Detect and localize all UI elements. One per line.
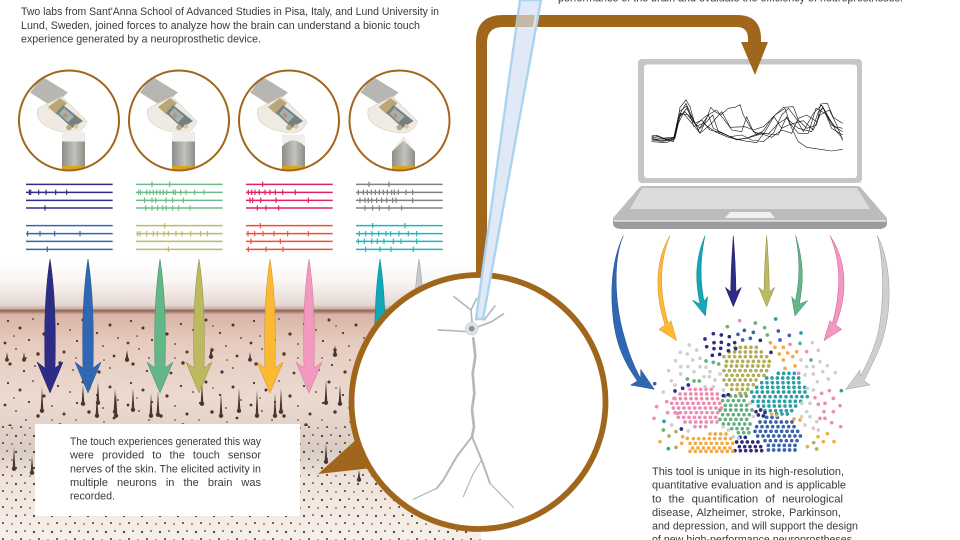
spike rasters <box>26 182 443 252</box>
raster: blue <box>26 226 113 252</box>
arrows: neuron signals into skin <box>37 259 432 393</box>
laptop base <box>613 186 887 229</box>
arrow: green <box>147 259 173 393</box>
cluster: teal <box>752 373 808 414</box>
pipette <box>476 0 541 319</box>
cluster: pink <box>672 389 722 427</box>
circle: neuron magnified <box>352 275 606 529</box>
neuron <box>413 297 513 507</box>
cluster: olive <box>724 347 773 393</box>
raster: gray <box>356 182 443 211</box>
curved arrow: teal <box>692 236 708 316</box>
intro text: Two labs from Sant'Anna School of Advanced Studies in Pisa, Italy, and Lund University in <box>21 6 439 18</box>
sparse dots: orange <box>660 343 834 447</box>
skin dense pores <box>0 424 481 540</box>
callout: touch experiences text box: were provided to the touch sensor <box>69 450 261 462</box>
sparse dots: blue <box>655 330 789 384</box>
intro text: experience generated by a neuroprosthetic device. <box>21 34 261 46</box>
callout: touch experiences text box: The touch experiences generated this way <box>70 436 261 448</box>
curved arrow: orange <box>658 236 677 341</box>
circle: fingertip sensor on rounded probe <box>239 70 339 172</box>
raster: cyan <box>356 223 443 252</box>
circle: fingertip sensor on pointed probe <box>350 70 450 172</box>
callout: touch experiences text box: recorded. <box>70 490 115 502</box>
arrows: channels from laptop to cluster map <box>612 236 889 389</box>
cluster: blue <box>755 417 803 450</box>
sparse dots: pink <box>654 321 841 427</box>
raster: navy <box>26 184 113 211</box>
sparse dots: navy <box>675 334 771 429</box>
raster: crimson <box>246 182 333 211</box>
callout: touch experiences text box: nerves of the skin. The elicited activity in <box>70 463 261 475</box>
cluster: navy <box>735 437 766 451</box>
circle: fingertip sensor on flat probe 1 <box>19 70 119 172</box>
callout: touch experiences text box <box>35 424 300 516</box>
straight arrow: olive <box>759 236 775 307</box>
sparse dots: green <box>663 323 811 430</box>
laptop screen <box>638 59 862 183</box>
conclusion text <box>652 466 858 540</box>
raster: red <box>246 223 333 252</box>
curved arrow: gray <box>846 236 889 389</box>
trackpad <box>725 212 775 218</box>
arrow: olive <box>186 259 212 393</box>
pipette crossing connector <box>516 15 535 27</box>
arrow: teal <box>367 259 393 393</box>
neural traces on screen <box>652 100 843 151</box>
conclusion text: quantitative evaluation and is applicable <box>652 480 846 492</box>
sparse dots: teal <box>664 319 841 449</box>
intro text: Lund, Sweden, joined forces to analyze how the brain can understand a bionic touch <box>21 20 420 32</box>
curved arrow: pink <box>824 236 844 341</box>
conclusion text: and depression, and will support the design <box>652 520 858 532</box>
arrow: gray <box>406 259 432 393</box>
intro text <box>21 6 439 46</box>
conclusion text: This tool is unique in its high-resolution, <box>652 466 844 478</box>
sparse dots: gray <box>663 343 835 438</box>
keyboard <box>630 188 870 209</box>
conclusion text: disease, Alzheimer, stroke, Parkinson, <box>652 507 841 519</box>
cluster: orange <box>690 434 735 451</box>
brown connector arrow to laptop <box>476 15 768 280</box>
cluster: green <box>720 396 753 433</box>
curved arrow: green <box>792 236 808 316</box>
conclusion text: to the quantification of neurological <box>652 493 843 505</box>
skin scattered pores <box>0 316 481 426</box>
straight arrow: navy <box>725 236 741 307</box>
circle: fingertip sensor on flat probe 2 <box>129 70 229 172</box>
callout: touch experiences text box: multiple neurons in the brain was <box>70 477 261 489</box>
raster: green <box>136 182 223 211</box>
dot cluster map <box>654 319 841 451</box>
panel: skin background <box>0 260 481 540</box>
arrow: blue <box>75 259 101 393</box>
arrow: pink <box>296 259 322 393</box>
arrow: navy <box>37 259 63 393</box>
sparse dots: olive <box>669 432 817 449</box>
laptop <box>613 59 887 229</box>
skin hairs <box>5 345 361 482</box>
callout pointer <box>318 438 372 474</box>
curved arrow: blue <box>612 236 654 389</box>
arrow: orange <box>257 259 283 393</box>
raster: olive <box>136 223 223 252</box>
